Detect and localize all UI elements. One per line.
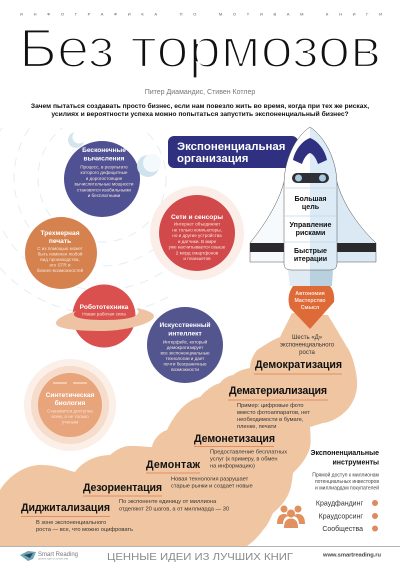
stage: demonetization: на информацию) [210, 464, 255, 470]
planet: networks and sensors: но и другие устройства [172, 232, 222, 238]
stage: dematerialization: вместо фотоаппаратов, нет [237, 410, 310, 416]
organization label [168, 136, 298, 168]
heading [82, 147, 126, 162]
planet: 3D printing [25, 217, 97, 289]
exponential tools heading: Экспоненциальные [310, 450, 379, 457]
stage: dematerialization: необходимости в бумаге, [237, 417, 304, 423]
stage: dematerialization: пленке, печати [237, 424, 276, 430]
stage: deception [83, 482, 229, 512]
footer logo: ценные идеи из лучших книг [38, 558, 69, 560]
planet: synthetic biology: ученым [62, 420, 78, 424]
rocket labels: итерации [294, 255, 327, 263]
stage: demonetization: Предоставление бесплатных [210, 450, 287, 456]
body text: которого дефицитные [81, 170, 128, 175]
nose chevron [293, 138, 327, 164]
rocket nozzle [288, 270, 333, 286]
tools description: и миллиардам покупателей [315, 484, 379, 492]
icon: small moon [68, 130, 86, 148]
planet: networks and sensors: 2 млрд смартфонов [176, 250, 219, 255]
planet: synthetic biology: всем, а не только [51, 414, 89, 419]
six D heading: Шесть «Д» [292, 335, 323, 341]
stage: demonetization: Демонетизация [194, 433, 275, 445]
key question: усилиях и вероятности успеха можно попытаться запустить экспоненциальный бизнес? [51, 110, 349, 118]
stage: disruption: старые рынки и создает новые [171, 484, 253, 490]
stage: deception: Дезориентация [83, 482, 162, 494]
planet: 3D printing: вид производства, [40, 257, 80, 262]
stage: demonetization: услуг (к примеру, в обмен [210, 456, 278, 462]
rocket [250, 127, 376, 329]
planet: 3D printing: С их помощью может [37, 246, 84, 251]
planet: synthetic biology: биология [55, 399, 86, 407]
stage: disruption [146, 459, 253, 490]
tools description: потенциальных инвесторов [315, 479, 379, 485]
smoke clouds [0, 313, 357, 546]
rocket body [284, 127, 337, 270]
rocket flame: Смысл [301, 305, 319, 311]
stage: democratization: Демократизация [255, 359, 342, 371]
planet: artificial intelligence [147, 307, 223, 383]
footer logo [20, 551, 78, 561]
footer rule [0, 546, 400, 548]
body text [74, 164, 134, 198]
key question [31, 102, 369, 118]
planet: artificial intelligence: все экспоненциальные [160, 350, 210, 356]
body text: и дорогостоящие [86, 176, 123, 181]
planet: robotics: Робототехника [80, 303, 129, 311]
authors: Питер Диамандис, Стивен Котлер [145, 89, 255, 96]
stage: demonetization [194, 433, 287, 470]
planet: robotics [56, 284, 154, 348]
planet: artificial intelligence: технологии и дает [166, 356, 205, 361]
key question: Зачем пытаться создавать просто бизнес, если нам повезло жить во время, когда при тех же рисках, [31, 102, 369, 110]
exponential tools heading [310, 450, 379, 466]
six D heading: экспоненциального [280, 342, 335, 348]
tools list: Краудфандинг [316, 500, 363, 508]
planet: networks and sensors: Сети и сенсоры [171, 214, 223, 221]
footer logo: Smart Reading [38, 552, 78, 558]
tools list: Сообщества [322, 525, 363, 533]
six D heading: роста [299, 350, 316, 356]
rocket labels: цель [302, 203, 320, 211]
planet: infinite computing [64, 130, 161, 217]
stage: digitization [21, 502, 133, 533]
heading: вычисления [84, 156, 125, 162]
icon: large moon [137, 154, 161, 177]
rocket flame: Мастерство [294, 298, 326, 304]
tools description [312, 472, 380, 492]
tools list [316, 500, 378, 533]
body text: вычислительные мощности [74, 182, 134, 187]
planet: artificial intelligence: интеллект [168, 330, 202, 338]
tools list: Краудсорсинг [319, 514, 363, 520]
organization label: Экспоненциальная [177, 141, 285, 153]
tools description: Прямой доступ к миллионам [312, 472, 380, 478]
planet: synthetic biology: Синтетическая [46, 392, 95, 399]
stage: digitization: В зоне экспоненциального [36, 520, 106, 526]
rocket labels [290, 195, 332, 263]
planet: 3D printing: его STR и [50, 262, 71, 268]
body text: Процесс, в результате [80, 164, 128, 170]
rocket labels: Быстрые [294, 247, 327, 255]
planet ring [56, 308, 154, 331]
planet: synthetic biology: Становится доступна [47, 408, 93, 414]
stage: deception: По экспоненте единицу от миллиона [119, 499, 217, 505]
stage: dematerialization: Пример: цифровые фото [237, 403, 304, 409]
planet: 3D printing: печать [49, 238, 71, 245]
planet: robotics: Новая рабочая сила [82, 312, 126, 316]
stage: digitization: Диджитализация [21, 502, 110, 514]
planet: networks and sensors: и датчики. В мире [178, 239, 217, 244]
rocket flame: Автономия [295, 291, 325, 297]
planet: 3D printing: Трехмерная [40, 230, 80, 237]
planet: networks and sensors: уже насчитывается свыше [169, 244, 226, 250]
rocket wings [250, 182, 376, 262]
six D heading [280, 335, 335, 356]
planet: networks and sensors: не только компьютеры, [172, 227, 222, 232]
rocket labels: Управление [290, 221, 332, 229]
icon: people [277, 506, 305, 528]
window capsule [292, 173, 329, 183]
planet: 3D printing: бизнес-возможностей [37, 267, 84, 273]
organization label: организация [177, 153, 248, 165]
rocket labels: Большая [294, 195, 327, 203]
header tagline: ИНФОГРАФИКА ПО МОТИВАМ КНИГИ [20, 12, 382, 16]
planet: artificial intelligence: возможности [171, 367, 199, 372]
footer slogan: ЦЕННЫЕ ИДЕИ ИЗ ЛУЧШИХ КНИГ [107, 552, 293, 563]
footer website: www.smartreading.ru [322, 552, 381, 558]
planet: artificial intelligence: Интерфейс, который [163, 338, 208, 344]
title: Без тормозов [19, 17, 381, 79]
planet: synthetic biology [24, 359, 116, 451]
stage: digitization: роста — все, что можно оцифровать [36, 527, 133, 533]
planet: networks and sensors: Интернет объединяет [174, 222, 221, 226]
stage: dematerialization [228, 385, 328, 430]
body text: становятся изобильными [77, 187, 131, 192]
planet: 3D printing: быть изменен любой [38, 250, 83, 256]
body text: и бесплатными [88, 193, 121, 198]
rocket labels: рисками [296, 229, 325, 237]
planet: networks and sensors [150, 186, 244, 280]
planet: networks and sensors: и планшетов [183, 256, 211, 261]
exponential tools heading: инструменты [332, 460, 379, 466]
stage: disruption: Демонтаж [146, 459, 200, 471]
stage: disruption: Новая технология разрушает [171, 477, 249, 483]
planet: artificial intelligence: почти безграничные [163, 362, 207, 366]
heading: Бесконечные [82, 147, 126, 154]
planet: artificial intelligence: демократизирует [167, 345, 204, 350]
planet: artificial intelligence: Искусственный [159, 321, 211, 329]
stage: dematerialization: Дематериализация [229, 385, 327, 397]
stage: deception: отделяют 20 шагов, а от миллиарда — 30 [119, 506, 229, 512]
rocket flame [289, 286, 334, 329]
